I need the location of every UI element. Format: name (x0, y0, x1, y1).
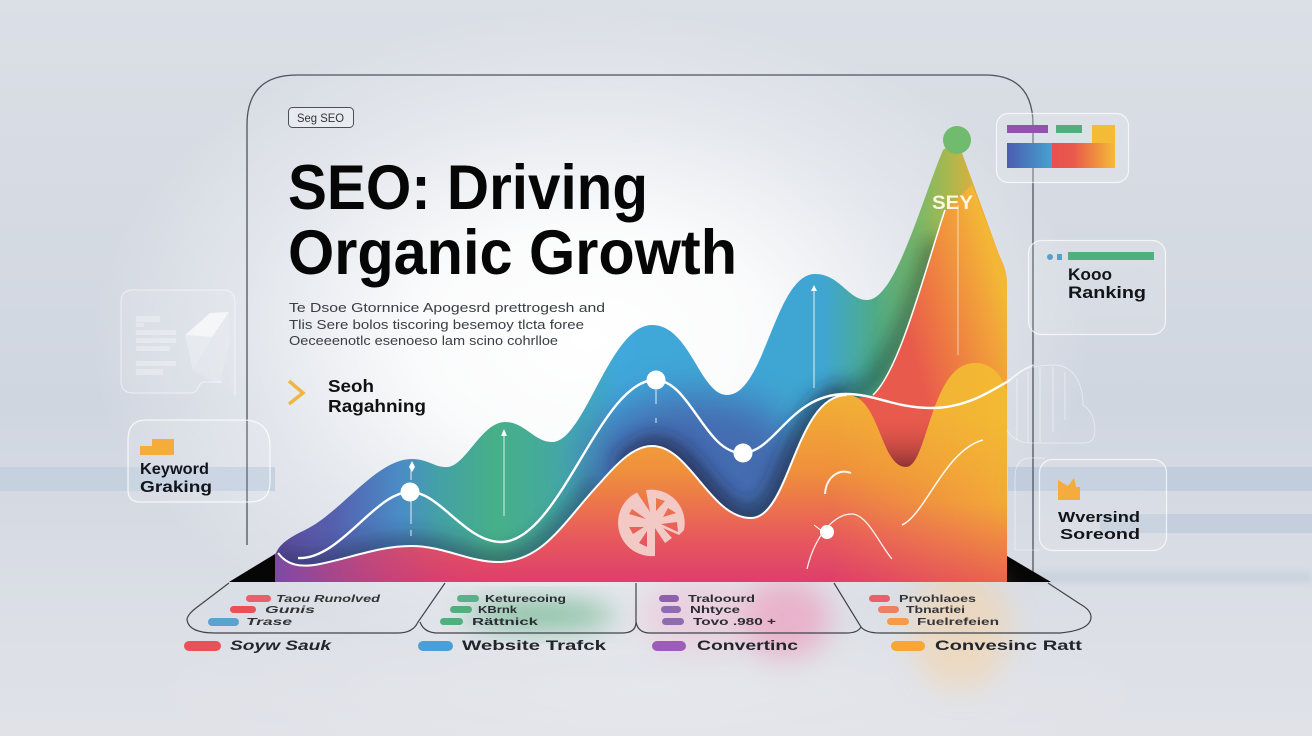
icon: orange check (1058, 478, 1080, 500)
legend: Convesinc Ratt (891, 637, 1082, 653)
card text: Soreond (1060, 526, 1140, 543)
back area: blue-green layer (275, 140, 1007, 582)
legend tabs outline (187, 583, 1091, 633)
description text: Oeceeenotlc esenoeso lam scino cohrlloe (289, 334, 558, 348)
search ranking callout (289, 376, 426, 416)
callout text: Seoh (328, 376, 374, 396)
label: SEY: SEY (932, 192, 973, 214)
colour smears under chart (465, 570, 1010, 690)
faint trend line extension (1010, 365, 1034, 380)
title: Organic Growth (288, 218, 737, 288)
tab 3 list (659, 593, 776, 628)
tab 3 list: Nhtyce (690, 604, 740, 616)
marker arrows (409, 285, 817, 472)
card text: Wversind (1058, 509, 1140, 526)
callout text (328, 376, 426, 416)
legend: Convesinc Ratt: Convesinc Ratt (935, 637, 1082, 653)
callout text: Ragahning (328, 396, 426, 416)
tab 4 list: Prvohlaoes (899, 593, 976, 605)
card text (1068, 266, 1146, 302)
platform triangles (229, 554, 1051, 582)
description text: Te Dsoe Gtornnice Apogesrd prettrogesh and (289, 301, 605, 315)
tag: Seg SEO (288, 108, 354, 128)
icon: arrow (289, 381, 303, 404)
white accent curves (807, 440, 983, 569)
ghost outline shape (1007, 365, 1095, 443)
tab 2 list: Rättnick (472, 616, 538, 628)
description text: Tlis Sere bolos tiscoring besemoy tlcta foree (289, 318, 584, 332)
white trend line (298, 380, 1010, 558)
tab 1 list: Trase (246, 616, 292, 628)
ghost card outline (1015, 458, 1045, 550)
tab 3 list: Traloourd (688, 593, 755, 605)
tab 2 list (440, 593, 566, 628)
indicator dots and bar (1047, 252, 1154, 260)
tab 4 list (869, 593, 999, 628)
tab 1 list: Gunis (265, 604, 315, 616)
card: mini bar chart (top right) (996, 114, 1128, 182)
background bands (0, 467, 1312, 582)
peak circle (943, 126, 971, 154)
card: document and plane (left) (121, 290, 235, 395)
icon: pie wheel (618, 490, 685, 556)
description text (289, 301, 605, 348)
icon: orange folder (140, 439, 174, 455)
card: Wversind Soreond (1040, 460, 1166, 550)
vertical markers (411, 205, 958, 536)
legend: Convertinc: Convertinc (697, 637, 798, 653)
legend row (184, 637, 1082, 653)
white edge of red layer (873, 210, 945, 395)
title (288, 153, 737, 288)
tab 4 list: Fuelrefeien (917, 616, 999, 628)
legend: Convertinc (652, 637, 798, 653)
legend: Soyw Sauk (184, 637, 333, 653)
card text (1058, 509, 1140, 543)
data points (400, 370, 834, 539)
tab 4 list: Tbnartiei (906, 604, 965, 616)
tab 1 list (208, 593, 381, 628)
card text: Ranking (1068, 284, 1146, 302)
red-orange layer (858, 185, 1007, 467)
card text (140, 461, 212, 496)
legend: Website Trafck: Website Trafck (462, 637, 606, 653)
front area: orange-pink layer (275, 363, 1007, 582)
card text: Keyword (140, 461, 209, 478)
white edge of front layer (278, 395, 847, 566)
card text: Graking (140, 479, 212, 496)
tab 1 list: Taou Runolved (276, 593, 381, 605)
document lines (136, 316, 176, 375)
title: SEO: Driving (288, 153, 648, 223)
tag: Seg SEO: Seg SEO (297, 111, 344, 125)
tab 3 list: Tovo .980 + (693, 616, 776, 628)
legend: Website Trafck (418, 637, 606, 653)
tab 2 list: Keturecoing (485, 593, 566, 605)
card: Keyword Graking (128, 420, 270, 502)
card: Kooo Ranking (1028, 240, 1166, 334)
icon: paper plane (185, 312, 230, 384)
chart: layered growth curves (275, 126, 1034, 590)
legend: Soyw Sauk: Soyw Sauk (230, 637, 333, 653)
card text: Kooo (1068, 266, 1112, 284)
main panel outline (247, 75, 1033, 572)
tab 2 list: KBrnk (478, 604, 517, 616)
mini bars (1007, 125, 1115, 168)
